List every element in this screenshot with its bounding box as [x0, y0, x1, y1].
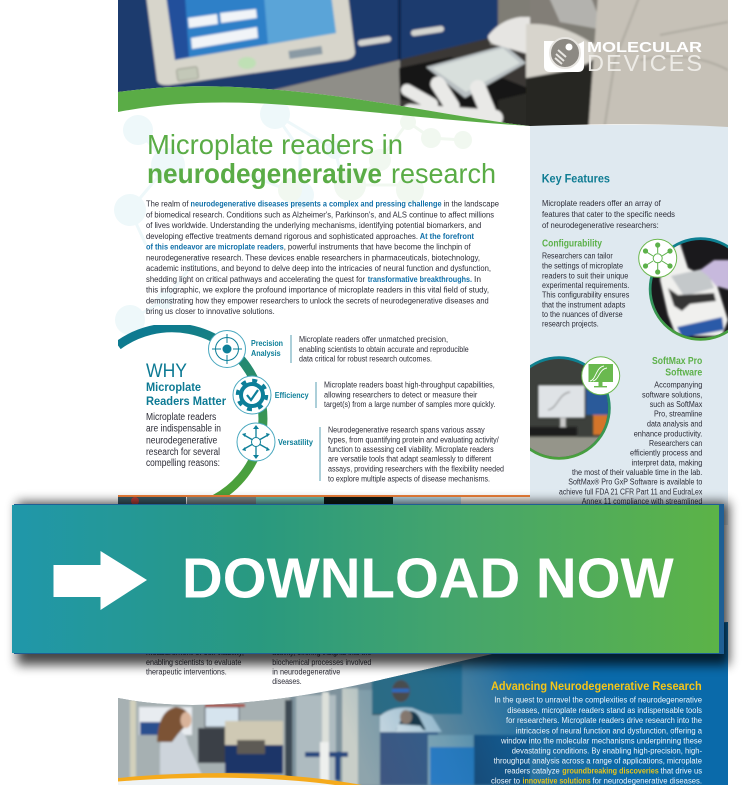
lower column text left — [146, 648, 244, 676]
advancing neurodegenerative research text: diseases, microplate readers stand as indispensable tools — [507, 706, 702, 715]
icon: softmax software monitor — [582, 357, 620, 395]
configurability text: the settings of microplate — [542, 261, 623, 270]
intro paragraph: this infographic, we explore the profound importance of microplate readers in this vital field of study, — [146, 286, 489, 295]
softmax pro text: efficiently process and — [630, 449, 702, 458]
download banner shadow — [17, 502, 729, 665]
why heading and intro: Microplate — [146, 380, 201, 394]
efficiency item: allowing researchers to detect or measure their — [324, 390, 478, 399]
icon: precision target — [208, 330, 246, 368]
precision analysis item — [251, 335, 469, 363]
intro paragraph: bring us closer to innovative solutions. — [146, 307, 275, 316]
key features intro: features that cater to the specific needs — [542, 210, 675, 219]
intro paragraph: neurodegenerative research. These devices enable researchers in pharmaceuticals, biotechnology, — [146, 253, 480, 262]
softmax pro text: such as SoftMax — [650, 400, 702, 409]
efficiency item — [275, 381, 495, 409]
why heading and intro: are indispensable in — [146, 424, 221, 435]
icon: efficiency gear — [233, 376, 271, 414]
intro paragraph: developing effective treatments demand rigorous and sophisticated approaches. — [146, 232, 418, 241]
softmax pro text: enhance productivity. — [634, 429, 702, 438]
title: research — [391, 158, 496, 189]
advancing neurodegenerative research text — [491, 679, 703, 785]
softmax pro text: data analysis and — [647, 419, 702, 428]
key features intro: Key Features — [542, 174, 610, 186]
versatility item: assays, providing researchers with the flexibility needed — [328, 464, 504, 473]
precision analysis item: data critical for robust research outcomes. — [299, 354, 432, 363]
configurability text — [542, 238, 629, 329]
configurability text: research projects. — [542, 320, 599, 329]
softmax pro text: software solutions, — [642, 390, 702, 399]
title: neurodegenerative — [147, 158, 382, 189]
configurability text: that the instrument adapts — [542, 300, 625, 309]
configurability text: to the nuances of diverse — [542, 310, 623, 319]
softmax pro text: Software — [665, 368, 703, 378]
lower column text right: activity, offering insights into the — [272, 648, 372, 657]
softmax pro text: Accompanying — [654, 381, 702, 390]
icon: configurability network — [639, 239, 677, 277]
softmax pro text: the most of their valuable time in the lab. — [572, 468, 702, 477]
intro paragraph: of lives worldwide. Understanding the underlying mechanisms, identifying potential biomarkers, and — [146, 221, 481, 230]
precision analysis item: enabling scientists to obtain accurate and reproducible — [299, 345, 469, 354]
intro paragraph: of biomedical research. Conditions such as Alzheimer's, Parkinson's, and ALS continue to affect millions — [146, 210, 494, 219]
softmax pro text: Annex 11 compliance with streamlined — [582, 497, 702, 506]
why heading and intro: WHY — [146, 360, 187, 382]
why heading and intro — [146, 360, 226, 469]
softmax pro text — [559, 356, 703, 506]
bottom photo: lab with researchers — [110, 620, 740, 785]
title: Microplate readers in — [147, 129, 403, 160]
arrow icon — [54, 551, 147, 610]
image strip with orange rule — [118, 495, 530, 509]
lower column text right: biochemical processes involved — [272, 658, 371, 667]
advancing neurodegenerative research text: readers catalyze — [505, 767, 560, 776]
versatility item: to explore multiple aspects of disease mechanisms. — [328, 474, 490, 483]
download now banner — [12, 504, 724, 654]
why heading and intro: compelling reasons: — [146, 458, 220, 469]
why heading and intro: neurodegenerative — [146, 435, 218, 446]
softmax pro text: achieve full FDA 21 CFR Part 11 and EudraLex — [559, 487, 702, 496]
configurability text: readers to suit their unique — [542, 271, 629, 280]
advancing neurodegenerative research text: that drive us — [660, 767, 702, 776]
configurability text: experimental requirements. — [542, 281, 629, 290]
versatility item: are versatile tools that adapt seamlessly to different — [328, 455, 492, 464]
softmax pro text: Researchers can — [649, 439, 702, 448]
advancing neurodegenerative research text: In the quest to unravel the complexities of neurodegenerative — [494, 696, 703, 705]
precision analysis item: Microplate readers offer unmatched precision, — [299, 335, 448, 344]
lower column text right: diseases. — [272, 677, 302, 686]
key features intro — [542, 174, 675, 230]
versatility item: Neurodegenerative research spans various assay — [328, 426, 485, 435]
versatility item: function to assessing cell viability. Microplate readers — [328, 445, 494, 454]
call to action label: DOWNLOAD NOW — [182, 546, 674, 610]
why heading and intro: Readers Matter — [146, 394, 226, 408]
intro paragraph — [146, 200, 500, 316]
softmax pro text: Pro, streamline — [654, 410, 703, 419]
intro paragraph: transformative breakthroughs. — [368, 275, 472, 284]
lower column text left: therapeutic interventions. — [146, 667, 227, 676]
yellow wave and footer — [118, 773, 362, 785]
softmax photo — [530, 356, 611, 460]
precision analysis item: Analysis — [251, 349, 281, 358]
configurability text: This configurability ensures — [542, 291, 629, 300]
softmax pro text: SoftMax Pro — [652, 356, 702, 367]
configurability photo — [648, 237, 728, 341]
advancing neurodegenerative research text: throughput analysis across a range of applications, microplate — [494, 756, 703, 765]
key features intro: Microplate readers offer an array of — [542, 199, 661, 208]
logo: Molecular Devices — [544, 38, 703, 76]
title — [147, 129, 496, 189]
advancing neurodegenerative research text: Advancing Neurodegenerative Research — [491, 679, 702, 693]
configurability text: Configurability — [542, 238, 602, 250]
intro paragraph: shedding light on critical pathways and accelerating the quest for — [146, 275, 365, 284]
lower column text left: enabling scientists to evaluate — [146, 658, 242, 667]
intro paragraph: of this endeavor are microplate readers — [146, 243, 284, 252]
softmax pro text: SoftMax® Pro GxP Software is available to — [568, 477, 703, 486]
efficiency item: target(s) from a large number of samples more quickly. — [324, 400, 495, 409]
advancing neurodegenerative research text: devastating conditions. By enabling high-precision, high- — [512, 746, 702, 755]
why heading and intro: Microplate readers — [146, 412, 216, 423]
intro paragraph: demonstrating how they empower researchers to unlock the secrets of neurodegenerative diseases and — [146, 296, 489, 305]
why section arc — [118, 328, 263, 500]
intro paragraph: The realm of — [146, 200, 189, 208]
advancing neurodegenerative research text: window into the molecular mechanisms underpinning these — [500, 736, 703, 745]
header photo: microplate reader and gloved hands — [110, 0, 740, 135]
green header wave — [118, 86, 530, 126]
intro paragraph: in the landscape — [444, 200, 500, 208]
molecule watermark — [114, 99, 472, 335]
intro paragraph: academic institutions, and beyond to delve deep into the intricacies of neural function and dysfunction, — [146, 264, 491, 273]
intro paragraph: In — [474, 275, 481, 284]
intro paragraph: At the forefront — [420, 232, 474, 241]
intro paragraph: neurodegenerative diseases presents a complex and pressing challenge — [190, 200, 442, 208]
advancing neurodegenerative research text: for researchers. Microplate readers drive research into the — [506, 716, 703, 725]
versatility item: Versatility — [278, 438, 313, 447]
intro paragraph: , powerful instruments that have become the linchpin of — [284, 243, 471, 252]
lower column text right — [272, 648, 372, 686]
icon: versatility arrows — [237, 423, 275, 461]
lower column text left: measurement of cell viability, — [146, 648, 244, 657]
lower column text right: in neurodegenerative — [272, 667, 341, 676]
logo: Molecular Devices: MOLECULAR — [587, 40, 703, 56]
configurability text: Researchers can tailor — [542, 252, 613, 261]
advancing neurodegenerative research text: groundbreaking discoveries — [562, 767, 659, 776]
why heading and intro: research for several — [146, 447, 220, 458]
key features intro: of neurodegenerative researchers: — [542, 221, 659, 230]
versatility item: types, from quantifying protein and evaluating activity/ — [328, 435, 499, 444]
advancing neurodegenerative research text: intricacies of neural function and dysfunction, offering a — [516, 726, 703, 735]
efficiency item: Microplate readers boast high-throughput capabilities, — [324, 381, 495, 390]
logo: Molecular Devices: DEVICES — [587, 50, 702, 76]
efficiency item: Efficiency — [275, 391, 309, 400]
versatility item — [278, 426, 504, 483]
softmax pro text: interpret data, making — [632, 458, 702, 467]
precision analysis item: Precision — [251, 339, 283, 348]
right panel: key features background — [530, 125, 728, 525]
